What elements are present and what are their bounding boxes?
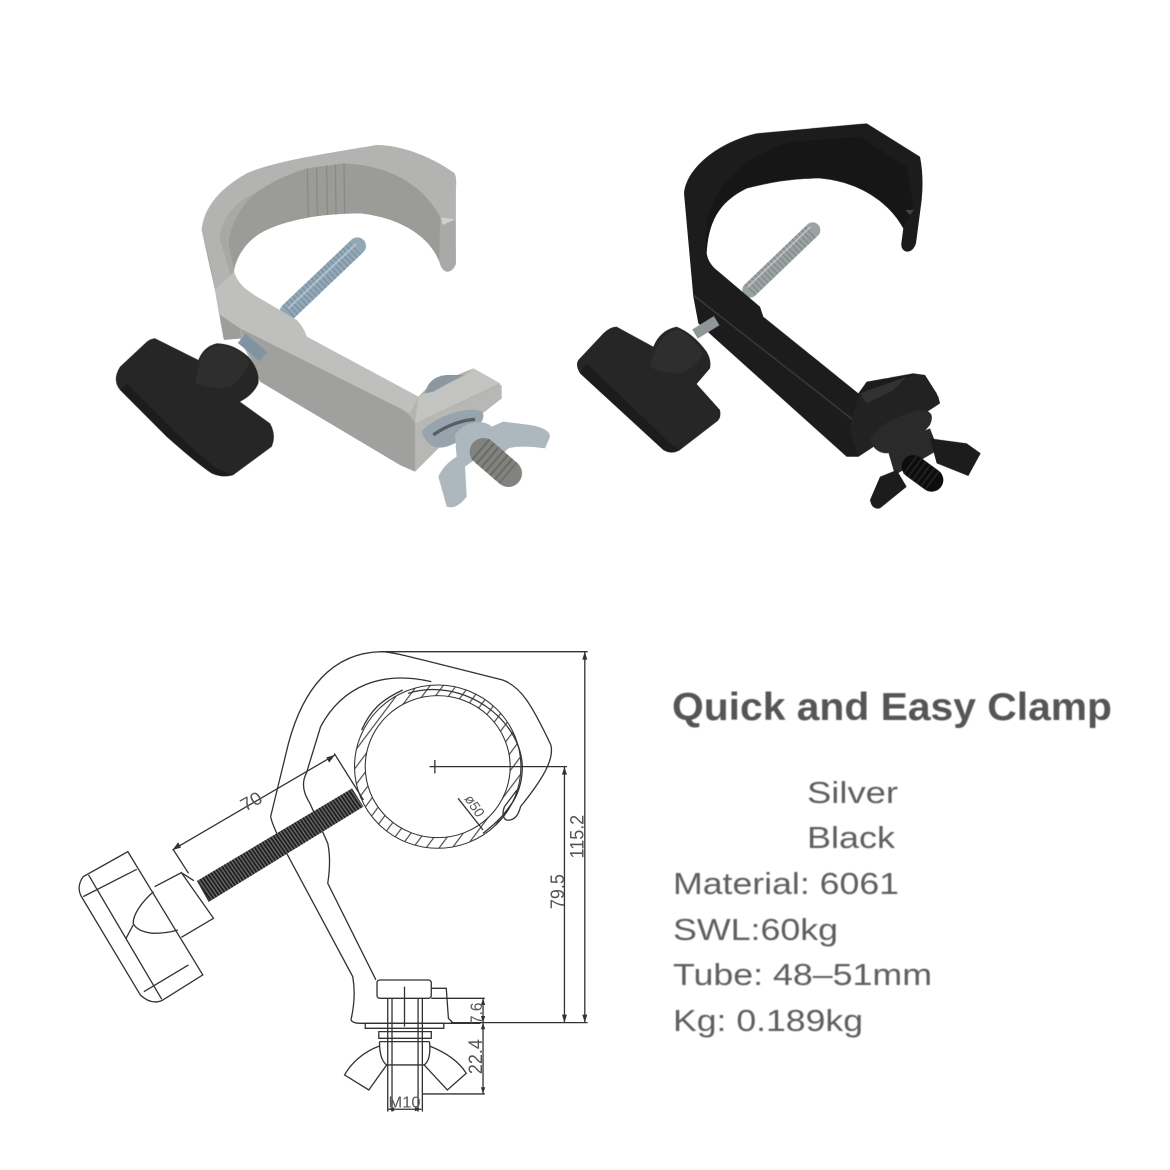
- dimension labels: 115.2: [566, 815, 587, 858]
- specification list: SWL:60kg: [673, 912, 838, 947]
- inner band: [707, 137, 913, 253]
- arm top face: [215, 272, 418, 413]
- hook tip: [439, 217, 456, 272]
- technical drawing: [79, 652, 588, 1112]
- inner band: [228, 163, 441, 270]
- clamp body: [202, 145, 502, 472]
- washer and wing nut: [422, 410, 550, 507]
- dimension labels: M10: [389, 1095, 421, 1111]
- upper threaded bolt: [747, 227, 813, 290]
- specification list: Silver: [807, 775, 898, 810]
- specification list: Black: [807, 820, 896, 855]
- arm side face: [240, 328, 415, 472]
- silver clamp photo: [116, 145, 550, 507]
- dimension labels: 7.6: [469, 1002, 486, 1024]
- bottom bolt and wing nut: [345, 980, 466, 1112]
- end block: [849, 375, 940, 457]
- specification list: [673, 775, 932, 1038]
- dimension labels: ø50: [461, 792, 489, 820]
- left spine shade: [202, 230, 242, 340]
- knob outline: [79, 852, 214, 1002]
- clamp body: [684, 123, 940, 457]
- threaded stub: [913, 467, 932, 480]
- black knob: [577, 327, 720, 452]
- dimension labels: 79.5: [547, 874, 568, 909]
- hook highlight: [905, 210, 914, 215]
- black clamp photo: [577, 123, 981, 509]
- upper threaded bolt: [288, 244, 357, 312]
- washer and wing nut: [870, 410, 981, 509]
- specification list: Material: 6061: [673, 866, 899, 901]
- threaded stub: [483, 452, 508, 473]
- dimension labels: 22.4: [464, 1039, 486, 1074]
- arm highlight: [693, 295, 853, 420]
- tube cross-section: [355, 685, 522, 848]
- title: Quick and Easy Clamp: [672, 686, 1112, 729]
- clamp outline: [271, 652, 551, 1023]
- dimension lines: [172, 652, 588, 1111]
- threaded bolt: [197, 788, 363, 902]
- lower bolt section: [242, 338, 263, 357]
- lower bolt section: [695, 321, 717, 334]
- grip grooves: [307, 163, 345, 217]
- specification list: Tube: 48–51mm: [673, 957, 932, 992]
- black knob: [116, 338, 274, 476]
- dimension labels: [237, 787, 587, 1111]
- specification list: Kg: 0.189kg: [673, 1003, 863, 1038]
- dimension labels: 70: [237, 787, 266, 815]
- end block: [415, 385, 502, 472]
